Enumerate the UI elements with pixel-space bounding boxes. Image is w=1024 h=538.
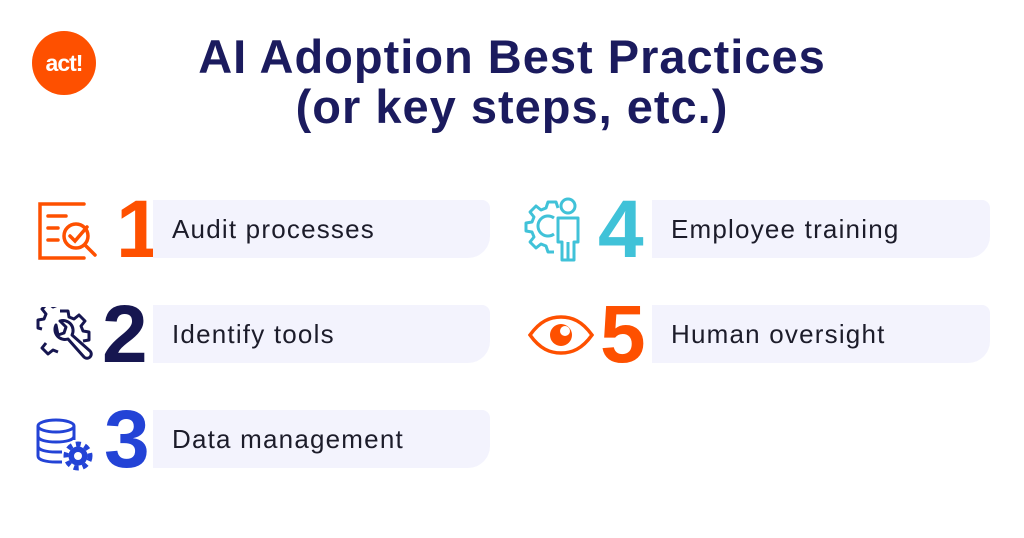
box: Audit processes: [153, 200, 490, 258]
box: Employee training: [652, 200, 990, 258]
icon: eye: [528, 315, 594, 355]
item 3: [36, 394, 490, 485]
number 1: 1: [116, 184, 160, 275]
icon: gear person: [524, 198, 580, 262]
title: [198, 30, 826, 133]
title: AI Adoption Best Practices: [198, 30, 826, 83]
box: Data management: [153, 410, 490, 468]
icon: database gear: [36, 418, 92, 470]
number 4: 4: [598, 184, 642, 275]
box: Audit processes: Audit processes: [172, 214, 375, 244]
title: (or key steps, etc.): [296, 80, 728, 133]
item 5: [528, 289, 990, 380]
item 2: [36, 289, 490, 380]
box: Human oversight: [652, 305, 990, 363]
logo: act!: [46, 50, 82, 76]
item 1: [38, 184, 490, 275]
icon: gear wrench: [36, 307, 93, 360]
icon: audit: [38, 202, 97, 260]
box: Human oversight: Human oversight: [671, 319, 886, 349]
number 3: 3: [104, 394, 148, 485]
number 2: 2: [102, 289, 146, 380]
logo: [32, 31, 96, 95]
box: Identify tools: Identify tools: [172, 319, 335, 349]
box: Data management: Data management: [172, 424, 404, 454]
box: Employee training: Employee training: [671, 214, 900, 244]
box: Identify tools: [153, 305, 490, 363]
item 4: [524, 184, 990, 275]
number 5: 5: [600, 289, 644, 380]
